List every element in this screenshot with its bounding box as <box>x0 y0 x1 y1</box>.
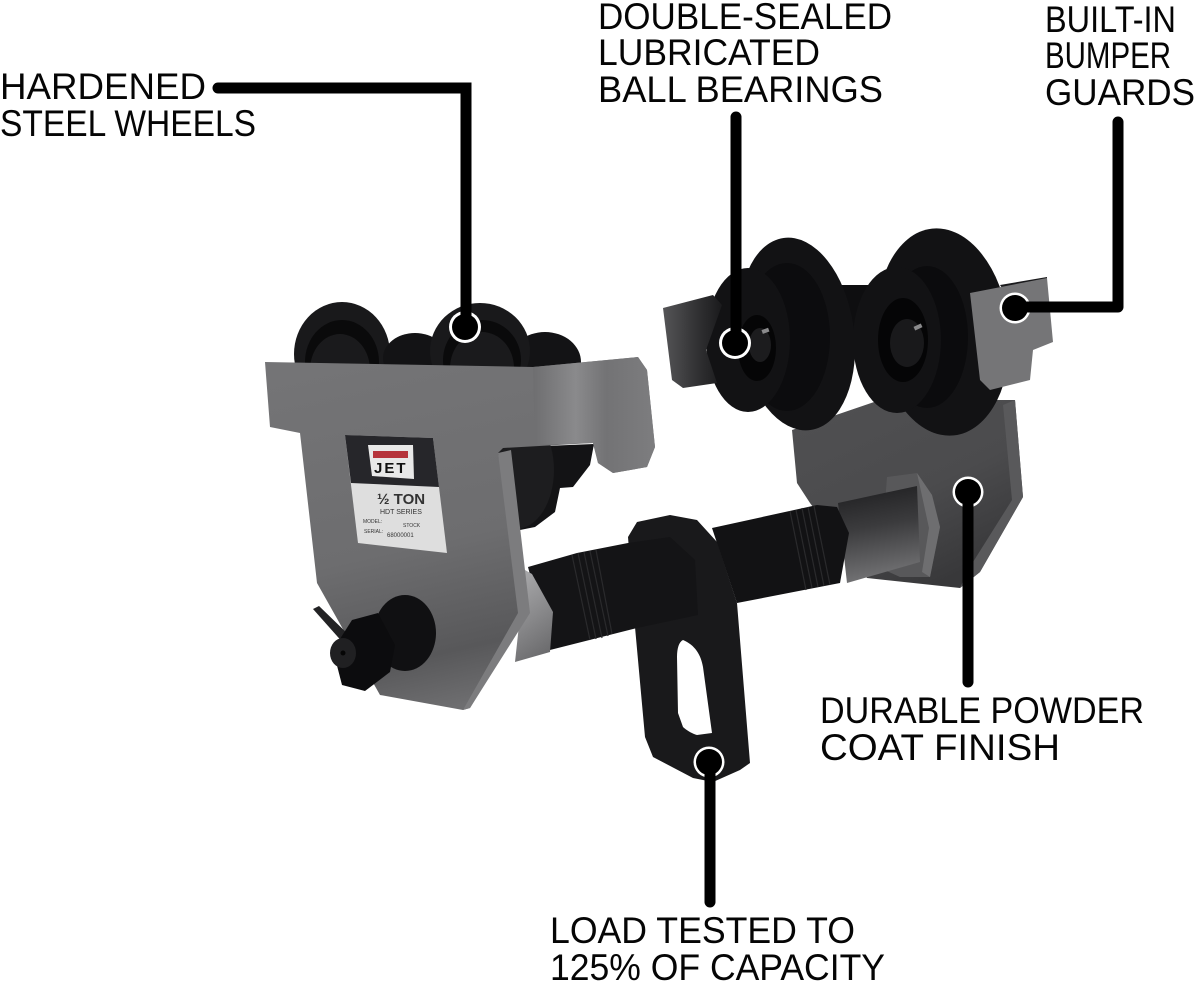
left plate wheels <box>294 302 581 406</box>
lifting eye <box>628 515 750 782</box>
nameplate <box>345 435 447 553</box>
label: BALL BEARINGS <box>598 69 883 110</box>
leader line <box>694 746 724 902</box>
label: COAT FINISH <box>820 727 1060 768</box>
leader line <box>218 88 481 343</box>
plate edge strip <box>463 450 530 710</box>
rear connecting block <box>840 285 875 340</box>
nameplate: HDT SERIES <box>380 509 422 516</box>
callout: hardened steel wheels <box>0 66 481 343</box>
nameplate: ½ TON <box>377 491 425 508</box>
label: GUARDS <box>1045 72 1195 113</box>
hook highlight <box>533 357 655 473</box>
leader line <box>952 476 984 682</box>
left rod stub <box>515 570 553 662</box>
label: HARDENED <box>0 66 206 107</box>
label: STEEL WHEELS <box>0 103 256 144</box>
leader line <box>1000 122 1118 324</box>
nameplate: MODEL: <box>363 519 382 525</box>
leader line <box>719 117 751 359</box>
left bumper guard <box>663 295 722 388</box>
callout: ball bearings <box>598 0 892 359</box>
left plate <box>265 357 655 710</box>
label: BUMPER <box>1045 35 1171 76</box>
right bumper guard <box>970 277 1053 390</box>
end nut and cotter pin <box>313 595 436 691</box>
nameplate: STOCK <box>403 523 421 529</box>
callout: bumper guards <box>1000 0 1195 324</box>
lower wheel behind plate <box>478 411 594 530</box>
nameplate: SERIAL: <box>364 529 383 535</box>
threaded rod right of eye <box>712 505 849 603</box>
label: LOAD TESTED TO <box>550 910 855 951</box>
rod weld collar <box>880 473 940 577</box>
JET logo: JET <box>374 460 408 477</box>
callout: load tested <box>550 746 885 984</box>
threaded rod left of eye <box>528 537 698 650</box>
callout: powder coat finish <box>820 476 1144 768</box>
label: DURABLE POWDER <box>820 690 1144 731</box>
thread grooves <box>572 506 830 640</box>
rod unthreaded right section <box>838 486 920 583</box>
nameplate: 68000001 <box>387 533 414 539</box>
left-hand wheel on right side <box>706 230 867 438</box>
right-hand wheel on right side <box>853 222 1020 442</box>
label: LUBRICATED <box>598 32 820 73</box>
product: beam trolley <box>265 222 1053 782</box>
right side plate <box>792 400 1023 588</box>
label: BUILT-IN <box>1045 0 1176 40</box>
